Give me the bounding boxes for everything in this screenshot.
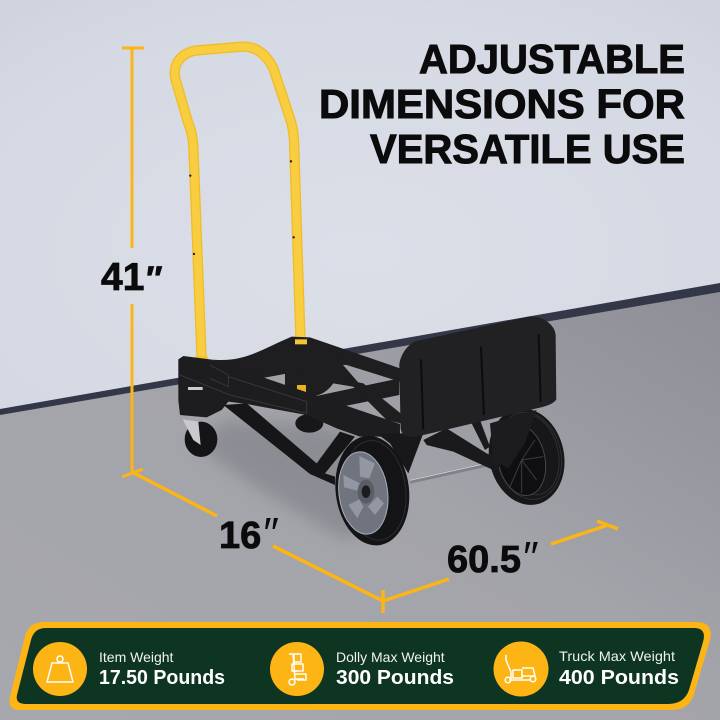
label: truck max weight: Truck Max Weight <box>559 648 675 664</box>
yellow handle <box>175 47 301 360</box>
width label: 16″ <box>219 509 278 558</box>
specs panel <box>9 622 711 710</box>
baseboard <box>0 283 720 415</box>
hand truck product illustration <box>175 47 573 550</box>
wall background <box>0 0 720 420</box>
diagonal strut <box>223 403 355 485</box>
frame detail <box>180 365 307 413</box>
title: DIMENSIONS FOR <box>319 81 685 127</box>
panel fill <box>17 628 704 704</box>
front frame <box>178 356 400 437</box>
bracket by big wheel <box>377 433 423 473</box>
height dimension line <box>122 48 144 477</box>
floor <box>0 290 720 720</box>
axle <box>410 462 500 482</box>
icon: truck <box>494 642 548 696</box>
value: truck max weight: 400 Pounds <box>559 667 679 689</box>
icon: dolly <box>270 642 324 696</box>
dimension lines <box>122 48 618 613</box>
floor shadow under cart <box>195 420 400 540</box>
height label: 41″ <box>101 256 162 299</box>
spec: item weight <box>33 642 225 696</box>
small rear wheel <box>295 414 323 433</box>
length label: 60.5″ <box>447 533 538 582</box>
inner yellow tube lower <box>297 385 306 395</box>
width dimension line <box>132 472 383 601</box>
value: dolly max weight: 300 Pounds <box>336 667 454 689</box>
title: VERSATILE USE <box>370 126 685 172</box>
label: dolly max weight: Dolly Max Weight <box>336 649 445 665</box>
spec: dolly max weight <box>270 642 454 696</box>
spec: truck max weight <box>494 642 679 696</box>
panel outline <box>9 622 711 710</box>
icon: weight <box>33 642 87 696</box>
label: item weight: Item Weight <box>99 649 174 665</box>
upper yellow tube ends <box>195 356 208 361</box>
title <box>319 36 685 172</box>
back plate <box>399 316 556 437</box>
caster wheel <box>183 419 217 457</box>
length dimension line <box>383 521 618 613</box>
rear rail and cross pieces <box>210 337 401 423</box>
back plate ribs <box>421 334 541 429</box>
cart frame and wheels <box>178 316 573 550</box>
value: item weight: 17.50 Pounds <box>99 667 225 689</box>
far wheel <box>480 401 573 512</box>
title: ADJUSTABLE <box>419 36 685 82</box>
big front wheel <box>329 432 415 550</box>
